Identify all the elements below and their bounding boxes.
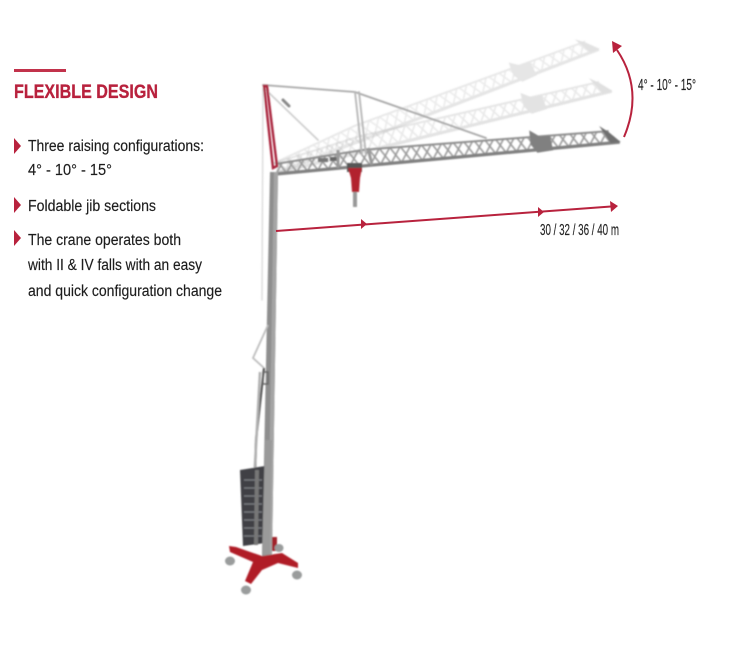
red base (229, 546, 298, 584)
crane illustration (225, 30, 621, 594)
main jib (274, 122, 621, 177)
bullet: falls (14, 230, 222, 300)
bullet: falls: with II & IV falls with an easy (27, 257, 202, 274)
arrow: raising angle (612, 41, 633, 137)
jib root machinery (318, 148, 372, 168)
bullet: falls: The crane operates both (28, 232, 181, 249)
bullet: foldable jib: Foldable jib sections (28, 198, 156, 215)
heading: FLEXIBLE DESIGN (14, 82, 158, 103)
bullet: raising configurations: Three raising configurations: (28, 138, 204, 155)
raised jib 10 degrees (272, 72, 613, 176)
lower mast overlay (262, 440, 272, 556)
side strut (252, 325, 268, 520)
mast (262, 172, 278, 556)
arrow: jib reach (276, 201, 618, 231)
ballast stack (240, 466, 265, 546)
label: radius: 30 / 32 / 36 / 40 m (540, 222, 619, 239)
bullet: raising configurations: 4° - 10° - 15° (28, 162, 112, 179)
hook block (347, 163, 362, 207)
raised jib 15 degrees (270, 30, 601, 176)
heading rule (14, 69, 66, 72)
tie rods (262, 85, 486, 300)
panel: flexible design text (14, 69, 222, 300)
bullet: falls: and quick configuration change (28, 283, 222, 300)
bullet: raising configurations (14, 138, 204, 179)
wheels (225, 544, 302, 594)
red A-frame (264, 86, 277, 168)
label: angles: 4° - 10° - 15° (638, 77, 696, 94)
